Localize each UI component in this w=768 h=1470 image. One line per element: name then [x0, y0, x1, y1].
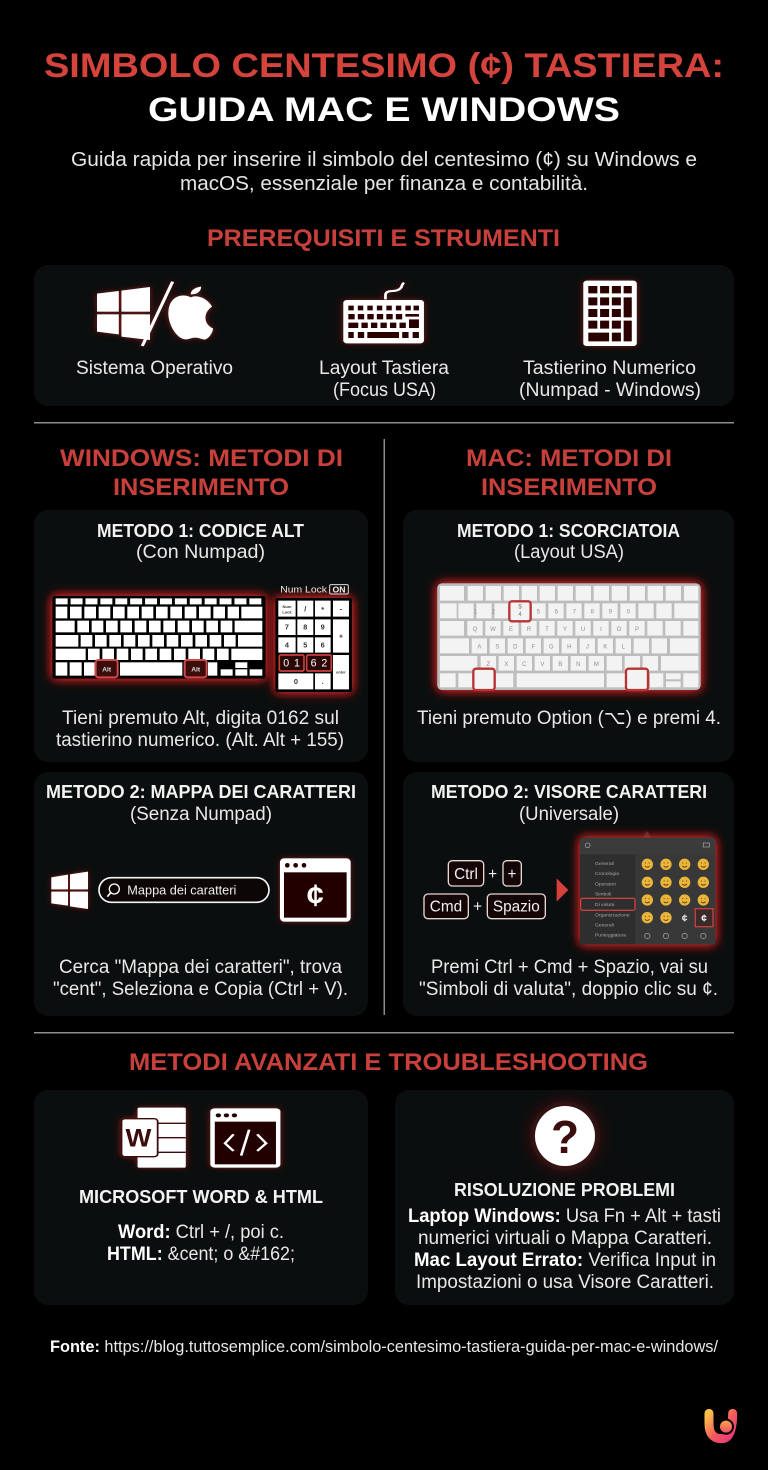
key: 4 highlighted: $	[518, 605, 522, 611]
character viewer illustration: Simboli	[595, 891, 611, 897]
subtitle: macOS, essenziale per finanza e contabilità.	[180, 173, 588, 195]
mac keyboard illustration: L	[622, 644, 626, 650]
key combo: +	[488, 866, 497, 883]
cent glyphs: ¢	[682, 914, 688, 925]
panel: windows metodo 2	[34, 772, 368, 1016]
icon: html window	[210, 1108, 280, 1168]
numpad illustration: +	[339, 631, 343, 640]
method text: "Simboli di valuta", doppio clic su ¢.	[419, 979, 718, 1000]
panel: windows metodo 1	[34, 510, 368, 762]
mac keyboard illustration: K	[603, 644, 607, 650]
panel text	[408, 1206, 721, 1293]
highlighted digits 62: 6 2	[311, 658, 327, 670]
numpad illustration: Num Lock	[280, 585, 327, 595]
panel heading: MICROSOFT WORD & HTML	[79, 1187, 323, 1207]
mac keyboard illustration: D	[513, 644, 518, 650]
key: alt left: Alt	[102, 666, 112, 673]
numpad illustration: Num	[283, 604, 292, 609]
mac keyboard illustration: P	[635, 627, 639, 633]
character viewer illustration: Generali	[595, 922, 614, 928]
mac keyboard illustration: O	[617, 627, 622, 633]
method text	[56, 708, 344, 751]
logo	[709, 1413, 734, 1439]
numpad illustration: Lock	[282, 609, 292, 614]
mac keyboard illustration: N	[576, 662, 580, 668]
keyboard illustration	[52, 596, 266, 679]
method heading: (Con Numpad)	[136, 542, 265, 563]
character viewer illustration: Di valuta	[595, 902, 615, 908]
mac keyboard illustration: 9	[609, 609, 613, 615]
mac keyboard illustration: B	[558, 662, 562, 668]
panel text	[107, 1222, 295, 1265]
label: layout tastiera: (Focus USA)	[333, 380, 436, 401]
character viewer illustration: Operatori	[595, 881, 616, 887]
label: tastierino numerico: (Numpad - Windows)	[519, 380, 701, 401]
character viewer illustration: Organizzazione	[595, 912, 630, 918]
icon: word	[121, 1108, 186, 1168]
mac keyboard illustration: 8	[591, 609, 595, 615]
heading: windows	[60, 445, 343, 501]
method text	[419, 957, 718, 1000]
mac keyboard illustration: G	[549, 644, 554, 650]
mac keyboard illustration: F	[531, 644, 535, 650]
mac keyboard illustration: M	[594, 662, 599, 668]
method heading: (Layout USA)	[514, 542, 624, 563]
numpad illustration: -	[340, 604, 343, 613]
icon: question mark: ?	[551, 1111, 579, 1163]
label: layout tastiera: Layout Tastiera	[319, 358, 449, 379]
mac keyboard illustration: X	[504, 662, 508, 668]
mac keyboard illustration: Z	[486, 662, 490, 668]
label: tastierino numerico	[519, 358, 701, 401]
numpad illustration: enter	[336, 669, 346, 674]
mac keyboard illustration: H	[567, 644, 571, 650]
numpad illustration: /	[304, 604, 306, 613]
heading: mac	[466, 445, 672, 501]
mac keyboard illustration: V	[540, 662, 544, 668]
method text: "cent", Seleziona e Copia (Ctrl + V).	[53, 979, 348, 1000]
numpad illustration: 8	[303, 623, 307, 632]
method heading	[431, 782, 707, 825]
panel text: Impostazioni o usa Visore Caratteri.	[416, 1272, 714, 1293]
icon: cent window: ¢	[307, 878, 324, 912]
character viewer illustration: Generali	[595, 861, 614, 867]
heading: metodi avanzati: METODI AVANZATI E TROUBLESHOOTING	[129, 1049, 648, 1076]
subtitle: Guida rapida per inserire il simbolo del centesimo (¢) su Windows e	[71, 149, 697, 171]
mac keyboard illustration: U	[581, 627, 585, 633]
mac keyboard illustration: 6	[555, 609, 559, 615]
mac keyboard illustration	[437, 583, 701, 690]
panel: risoluzione problemi	[395, 1090, 734, 1305]
heading: prerequisiti: PREREQUISITI E STRUMENTI	[207, 225, 560, 252]
character viewer illustration	[580, 831, 715, 944]
numpad illustration: 4	[285, 640, 290, 649]
key: option right	[626, 669, 648, 690]
mac keyboard illustration: S	[495, 644, 499, 650]
highlighted digits 01: 0 1	[283, 658, 300, 670]
heading: windows: INSERIMENTO	[113, 474, 289, 501]
mac keyboard illustration: Y	[563, 627, 567, 633]
key: alt right	[185, 660, 207, 677]
mac keyboard illustration: C	[522, 662, 527, 668]
search bar	[99, 878, 269, 902]
icon: numpad	[583, 281, 637, 346]
mac keyboard illustration: 1	[474, 609, 478, 615]
source: Fonte: https://blog.tuttosemplice.com/simbolo-centesimo-tastiera-guida-per-mac-e-windows/	[50, 1337, 718, 1356]
panel text: Word: Ctrl + /, poi c.	[118, 1222, 284, 1243]
icon: word: W	[126, 1125, 152, 1153]
panel text: Laptop Windows: Usa Fn + Alt + tasti	[408, 1206, 721, 1227]
method heading: METODO 1: CODICE ALT	[97, 521, 304, 541]
icon: windows and apple	[97, 282, 213, 346]
method heading: METODO 2: MAPPA DEI CARATTERI	[46, 782, 356, 802]
cent glyphs: ¢	[701, 914, 707, 925]
mac keyboard illustration: R	[527, 627, 532, 633]
panel: mac metodo 1	[403, 510, 734, 762]
cent glyphs	[682, 909, 713, 927]
method heading: METODO 2: VISORE CARATTERI	[431, 782, 707, 802]
panel text: numerici virtuali o Mappa Caratteri.	[418, 1228, 712, 1249]
mac keyboard illustration: 7	[573, 609, 577, 615]
title	[44, 47, 724, 129]
key combo: +	[508, 866, 517, 883]
method heading: METODO 1: SCORCIATOIA	[457, 521, 680, 541]
mac keyboard illustration: 3	[510, 609, 514, 615]
key combo	[424, 861, 545, 919]
title: SIMBOLO CENTESIMO (¢) TASTIERA:	[44, 47, 724, 85]
numpad illustration: 7	[285, 623, 289, 632]
panel text: Mac Layout Errato: Verifica Input in	[414, 1250, 716, 1271]
method text: tastierino numerico. (Alt. Alt + 155)	[56, 730, 344, 751]
icon: question mark	[535, 1106, 595, 1166]
panel: prerequisiti	[34, 265, 734, 406]
method text	[53, 957, 348, 1000]
icon: windows logo	[51, 872, 88, 909]
numpad illustration: 0	[294, 677, 298, 686]
method heading: (Universale)	[519, 804, 619, 825]
panel heading: RISOLUZIONE PROBLEMI	[454, 1180, 675, 1200]
method heading	[457, 521, 680, 563]
method heading	[46, 782, 356, 825]
numpad illustration	[275, 584, 352, 692]
character viewer illustration: Punteggiatura	[595, 933, 626, 939]
mac keyboard illustration: Q	[473, 627, 478, 633]
label: layout tastiera	[319, 358, 449, 401]
heading: mac: INSERIMENTO	[481, 474, 657, 501]
numpad illustration: *	[321, 605, 324, 614]
key combo: Cmd	[430, 899, 462, 916]
icon: keyboard	[343, 283, 424, 343]
mac keyboard illustration: E	[509, 627, 513, 633]
mac keyboard illustration: 0	[627, 609, 631, 615]
key: alt left	[96, 660, 118, 677]
method heading	[97, 521, 304, 563]
key: option left	[473, 669, 495, 690]
icon: cent window	[280, 858, 351, 922]
label: tastierino numerico: Tastierino Numerico	[523, 358, 696, 379]
mac keyboard illustration: 5	[537, 609, 541, 615]
arrow	[557, 878, 568, 902]
key: alt right: Alt	[191, 666, 201, 673]
heading: windows: WINDOWS: METODI DI	[60, 445, 343, 472]
panel text: HTML: &cent; o &#162;	[107, 1244, 295, 1265]
method text: Tieni premuto Alt, digita 0162 sul	[62, 708, 339, 729]
search bar: Mappa dei caratteri	[127, 884, 236, 898]
key: 4 highlighted	[509, 601, 531, 621]
title: GUIDA MAC E WINDOWS	[148, 91, 620, 129]
method heading: (Senza Numpad)	[130, 804, 272, 825]
panel: mac metodo 2	[403, 772, 734, 1016]
selected category	[581, 898, 635, 910]
key: 4 highlighted: 4	[518, 612, 522, 618]
key combo: Ctrl	[454, 866, 478, 883]
mac keyboard illustration: I	[600, 627, 602, 633]
mac keyboard illustration: T	[545, 627, 549, 633]
method text: Cerca "Mappa dei caratteri", trova	[59, 957, 342, 978]
numpad illustration: 9	[321, 623, 325, 632]
method text: Premi Ctrl + Cmd + Spazio, vai su	[431, 957, 708, 978]
key combo: Spazio	[493, 899, 540, 916]
mac keyboard illustration: J	[586, 644, 589, 650]
subtitle	[71, 149, 697, 195]
method text: Tieni premuto Option (⌥) e premi 4.	[417, 708, 721, 729]
key combo: +	[473, 899, 482, 916]
numpad illustration: .	[322, 677, 324, 686]
character viewer illustration: Cronologia	[595, 871, 619, 877]
mac keyboard illustration: A	[477, 644, 481, 650]
numpad illustration: ON	[332, 584, 345, 594]
heading: mac: MAC: METODI DI	[466, 445, 672, 472]
numpad illustration: 5	[303, 640, 307, 649]
label: sistema operativo: Sistema Operativo	[76, 358, 233, 379]
panel: word e html	[34, 1090, 368, 1305]
mac keyboard illustration: 2	[492, 609, 496, 615]
numpad illustration: 6	[321, 640, 325, 649]
mac keyboard illustration: W	[490, 627, 496, 633]
